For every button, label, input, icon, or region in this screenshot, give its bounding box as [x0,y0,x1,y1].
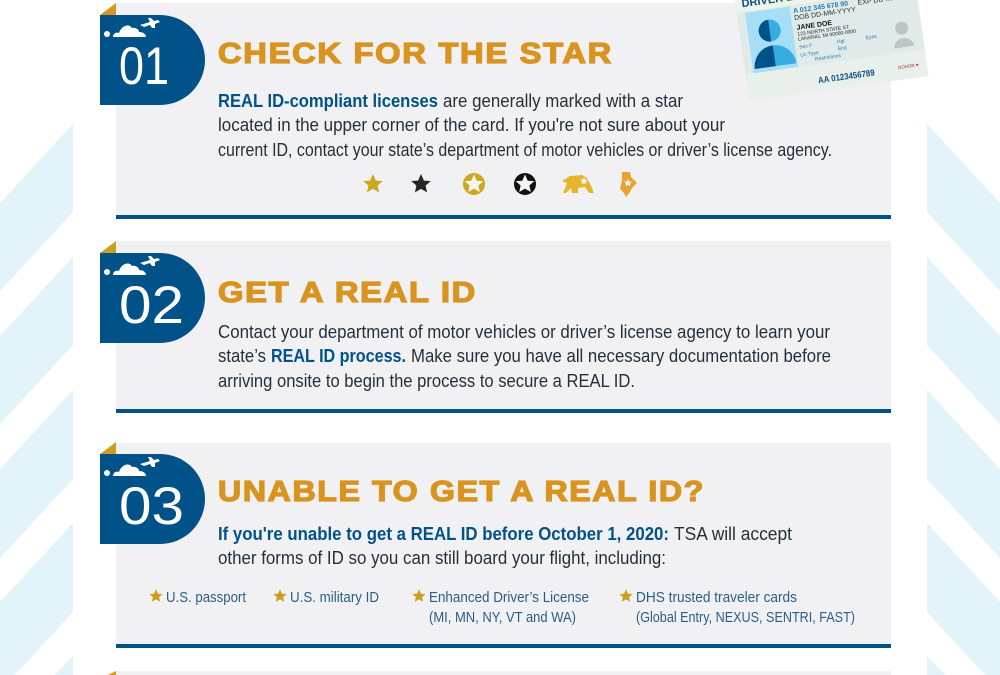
license card: End [838,45,847,52]
panel: get a real id [100,241,891,413]
heading 03: UNABLE TO GET A REAL ID? [218,476,705,508]
list: accepted IDs: (Global Entry, NEXUS, SENTRI, FAST) [636,609,855,626]
license card: JANE DOE [796,20,833,32]
license card [733,0,930,101]
body text 03: TSA will accept [674,524,792,544]
badge 01 [100,3,205,105]
panel: unable to get a real id [100,442,891,648]
license card: 123 NORTH STATE ST. [797,24,850,38]
license card: Restrictions [815,53,842,63]
body text 01: are generally marked with a star [443,91,683,111]
body text 02: Contact your department of motor vehicles or driver’s license agency to learn your [218,322,830,342]
body text 01 [218,91,832,160]
badge 02: 02 [119,276,184,335]
badge 02 [100,241,205,343]
license card: Lic Type [800,50,819,59]
body text 01: REAL ID-compliant licenses [218,91,438,111]
panel: next step, cropped [108,671,891,675]
star icons row [363,172,637,197]
list: accepted IDs: (MI, MN, NY, VT and WA) [429,609,576,626]
list: accepted IDs [149,589,855,626]
body text 03: If you're unable to get a REAL ID before October 1, 2020: [218,524,669,544]
license card: A 012 345 678 90 [793,0,849,15]
badge 03: 03 [119,477,184,536]
body text 02 [218,322,831,391]
license card: Sex F [799,43,813,51]
license card: AA 0123456789 [817,67,875,85]
panel: check for the star [100,0,930,219]
body text 01: located in the upper corner of the card. If you're not sure about your [218,115,725,135]
list: accepted IDs: U.S. passport [166,589,247,606]
heading 01: CHECK FOR THE STAR [218,38,613,70]
badge 03 [100,442,205,544]
heading 02: GET A REAL ID [218,277,477,309]
body text 01: current ID, contact your state’s department of motor vehicles or driver’s license agency. [218,140,832,160]
list: accepted IDs: U.S. military ID [290,589,379,606]
license card: Eyes [865,34,878,41]
body text 02: arriving onsite to begin the process to secure a REAL ID. [218,371,635,391]
license card: LANSING, MI 00000-0000 [798,29,857,43]
license card: DONOR ♥ [898,62,919,70]
body text 02: state’s [218,346,266,366]
body text 02: REAL ID process. [271,346,406,366]
body text 03: other forms of ID so you can still board your flight, including: [218,548,666,568]
list: accepted IDs: DHS trusted traveler cards [636,589,797,606]
body text 02: Make sure you have all necessary documentation before [411,346,831,366]
license card: Hgt [837,38,846,45]
badge 01: 01 [119,37,169,96]
background chevrons right [927,124,1000,675]
list: accepted IDs: Enhanced Driver’s License [429,589,589,606]
background chevrons left [0,124,73,675]
license card: DOB DD-MM-YYYY [794,6,857,22]
body text 03 [218,524,792,568]
